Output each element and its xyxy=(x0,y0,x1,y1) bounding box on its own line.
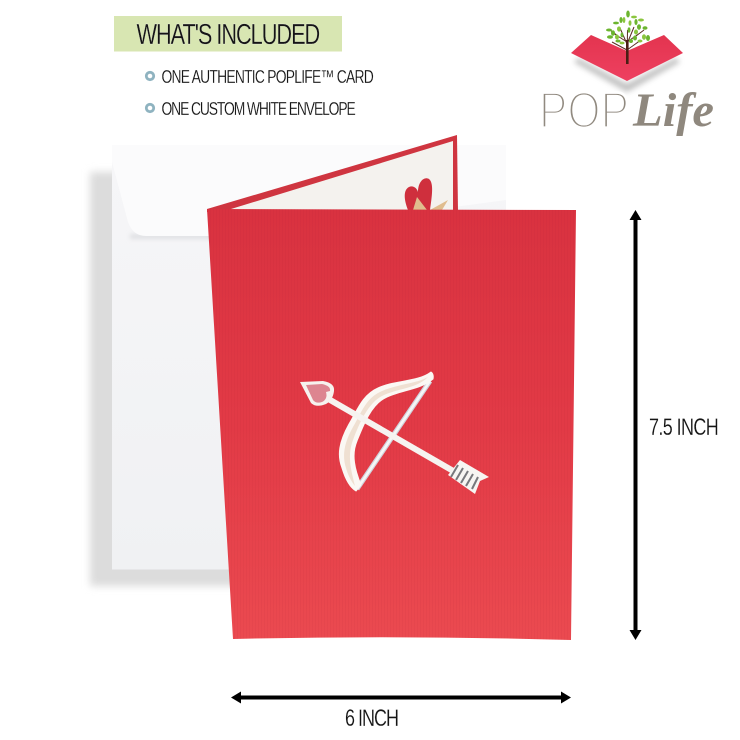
card front xyxy=(207,209,576,640)
card back red edge xyxy=(207,135,458,212)
envelope flap xyxy=(112,145,506,236)
card inside page xyxy=(231,141,453,212)
bow and arrow emblem xyxy=(300,372,489,494)
envelope shadow xyxy=(90,172,240,586)
logo wordmark POP: POP xyxy=(539,82,629,138)
arrow shaft xyxy=(325,397,455,472)
heading: what's included: WHAT'S INCLUDED xyxy=(136,19,320,51)
envelope flap shadow xyxy=(130,234,220,239)
envelope body xyxy=(112,145,506,570)
card paper texture xyxy=(207,209,576,640)
arrow: height dimension xyxy=(630,210,642,640)
bullet item: envelope: ONE CUSTOM WHITE ENVELOPE xyxy=(162,99,356,120)
arrow heart head xyxy=(300,381,334,406)
card front panel xyxy=(207,209,576,640)
logo shadow xyxy=(574,58,680,92)
peek: arrow feather right xyxy=(430,200,448,210)
label: 7.5 inch: 7.5 INCH xyxy=(649,415,719,441)
arrow fletching xyxy=(448,460,489,494)
card back panel xyxy=(207,135,458,212)
bow string xyxy=(357,381,430,489)
list: included items xyxy=(146,67,374,120)
logo: PopLife xyxy=(539,10,714,138)
bow limb xyxy=(339,372,433,491)
arrow: width dimension xyxy=(231,692,571,704)
peek: heart xyxy=(405,178,432,210)
bullet item: card: ONE AUTHENTIC POPLIFE™ CARD xyxy=(162,67,374,88)
label: 6 inch: 6 INCH xyxy=(345,706,399,732)
envelope xyxy=(90,145,506,586)
peek: arrow feather left xyxy=(413,197,427,210)
logo tree xyxy=(606,10,650,64)
logo wordmark Life: Life xyxy=(632,84,714,137)
logo open book xyxy=(571,35,683,81)
